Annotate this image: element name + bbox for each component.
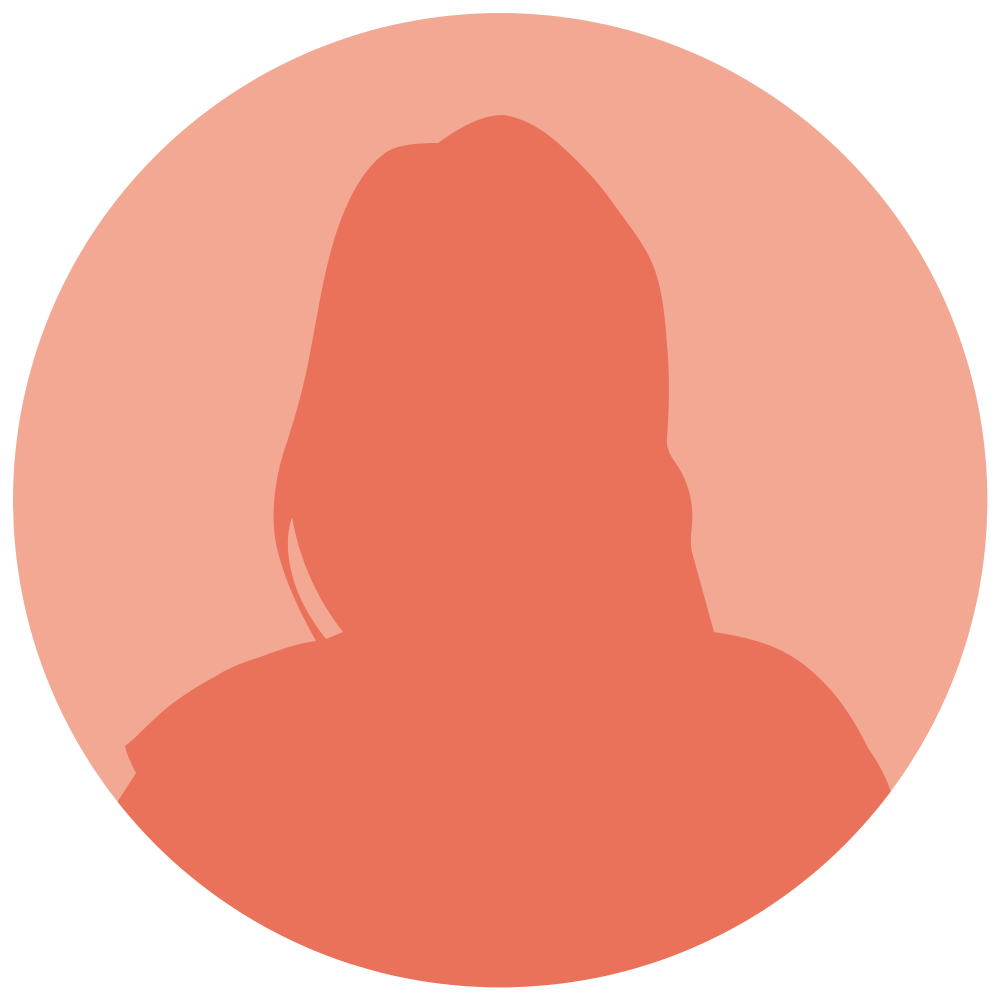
silhouette of a person [100, 115, 900, 1000]
